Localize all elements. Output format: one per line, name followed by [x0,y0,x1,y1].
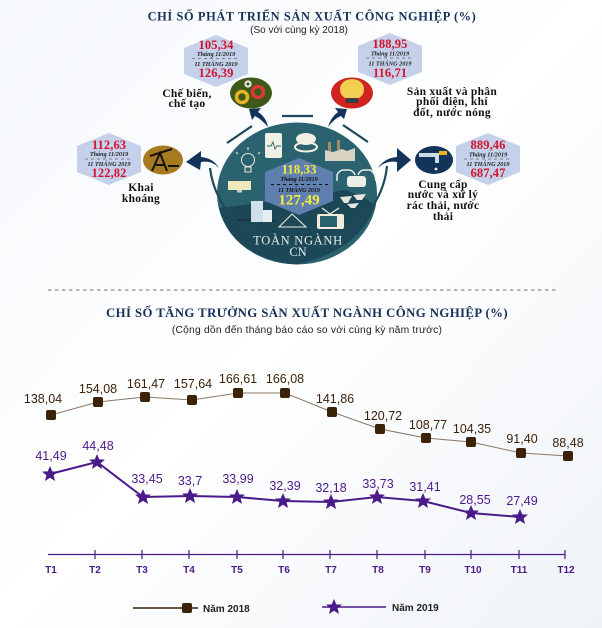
series 2018 [24,372,584,461]
icon: cup [295,133,317,152]
subtitle: top section: (So với cùng kỳ 2018) [250,25,348,36]
series 2018: 157,64 [174,377,212,391]
series 2019: 41,49 [35,449,67,463]
branch: mining [77,133,183,205]
hexagon values: 116,71 [373,66,407,80]
label: nước và xử lý [408,189,478,201]
center hexagon: 127,49 [278,192,320,208]
series 2018: 161,47 [127,377,165,391]
hexagon values [77,133,141,185]
label [407,178,479,223]
axis: T2 [89,565,101,576]
series 2019: 33,73 [362,477,394,491]
label: Cung cấp [418,178,468,191]
icon: buildings [237,201,276,222]
series 2019: 32,18 [315,481,347,495]
series 2018: 104,35 [453,422,491,436]
series 2018: 166,08 [266,372,304,386]
hexagon values: 11 THÁNG 2019 [88,160,130,168]
series 2019: 28,55 [459,493,491,507]
axis: T8 [372,565,384,576]
legend: 2018 [133,603,250,615]
legend: 2018: Năm 2018 [203,604,250,615]
hexagon values: 11 THÁNG 2019 [467,160,509,168]
hexagon values: Tháng 11/2019 [371,50,409,58]
subtitle: chart section: (Cộng dồn đến tháng báo cáo so với cùng kỳ năm trước) [172,324,442,336]
series 2018: 108,77 [409,418,447,432]
legend: 2019: Năm 2019 [392,603,439,614]
axis: T6 [278,565,290,576]
label [407,85,497,119]
label: Chế biến, [162,87,212,100]
series 2018: 120,72 [364,409,402,423]
label: Sản xuất và phân [407,85,497,98]
hexagon values: 105,34 [199,38,234,52]
branch: processing and manufacturing [162,35,272,110]
icon: factory [325,140,355,161]
label: chế tạo [169,97,205,110]
branch: water and waste [407,133,520,223]
icon: cars [337,170,376,187]
hexagon values: Tháng 11/2019 [469,152,507,158]
axis: T11 [511,565,528,576]
series 2019: 32,39 [269,479,301,493]
arrows from circle to branches [186,108,411,172]
axis: T5 [231,565,243,576]
axis: T3 [136,565,148,576]
branch: electricity [331,33,497,119]
hexagon values [456,133,520,185]
series 2019: 33,45 [131,472,163,486]
series 2019 [35,439,538,524]
series 2019: 27,49 [506,494,538,508]
hexagon values: 112,63 [92,138,126,152]
series 2019: 31,41 [409,480,441,494]
series 2018: 88,48 [552,436,584,450]
central circle: whole industry [210,116,387,264]
icon: oil pump [143,146,183,174]
hexagon values: 126,39 [199,66,233,80]
hexagon values: Tháng 11/2019 [90,151,128,158]
axis: T9 [419,565,431,576]
legend: 2019 [322,599,439,614]
series 2019: 33,7 [178,474,202,488]
center hexagon: 11 THÁNG 2019 [278,186,320,194]
axis: T4 [183,565,195,576]
series 2018: 166,61 [219,372,257,386]
line chart [24,372,584,615]
icon: water tap [415,146,453,174]
hexagon values: 889,46 [471,138,505,152]
icon: phone [265,133,282,158]
title: chart section: CHỈ SỐ TĂNG TRƯỞNG SẢN XUẤT NGÀNH CÔNG NGHIỆP (%) [106,305,508,320]
center hexagon [265,158,333,215]
hexagon values: Tháng 11/2019 [197,51,235,58]
icon: triangle sign [279,214,306,227]
icon: television [317,208,344,229]
series 2018: 138,04 [24,392,62,406]
icons in circle [228,133,376,229]
label [162,87,212,110]
center hexagon: Tháng 11/2019 [280,177,318,183]
icon: bulb [236,147,260,172]
label: thải [433,211,454,223]
hexagon values [358,33,422,85]
axis: T12 [557,565,575,576]
icon: monitor [228,181,251,192]
circle label: TOÀN NGÀNH [253,234,343,248]
series 2018: 91,40 [506,432,538,446]
central circle: whole industry: CN [289,245,307,259]
label: đốt, nước nóng [413,106,491,119]
axis: T10 [464,565,482,576]
hexagon values: 122,82 [92,166,126,180]
hexagon values: 11 THÁNG 2019 [195,60,237,68]
label: phối điện, khí [416,95,488,108]
title: top section: CHỈ SỐ PHÁT TRIỂN SẢN XUẤT CÔNG NGHIỆP (%) [148,8,476,24]
series 2018: 154,08 [79,382,117,396]
series 2019: 44,48 [82,439,114,453]
icon: diamonds [340,194,366,208]
axis: T1 [45,565,57,576]
label: rác thải, nước [407,200,479,212]
label: Khai [128,182,154,194]
series 2019: 33,99 [222,472,254,486]
center hexagon: 118,33 [281,162,317,176]
hexagon values: 188,95 [373,37,407,51]
hexagon values [184,35,248,87]
label [122,182,160,205]
series 2018: 141,86 [316,392,354,406]
icon: gears [230,78,272,108]
axis: T7 [325,565,337,576]
label: khoáng [122,193,160,205]
hexagon values: 11 THÁNG 2019 [369,60,411,68]
icon: light bulb [331,78,373,108]
hexagon values: 687,47 [471,166,505,180]
axis [45,550,575,576]
